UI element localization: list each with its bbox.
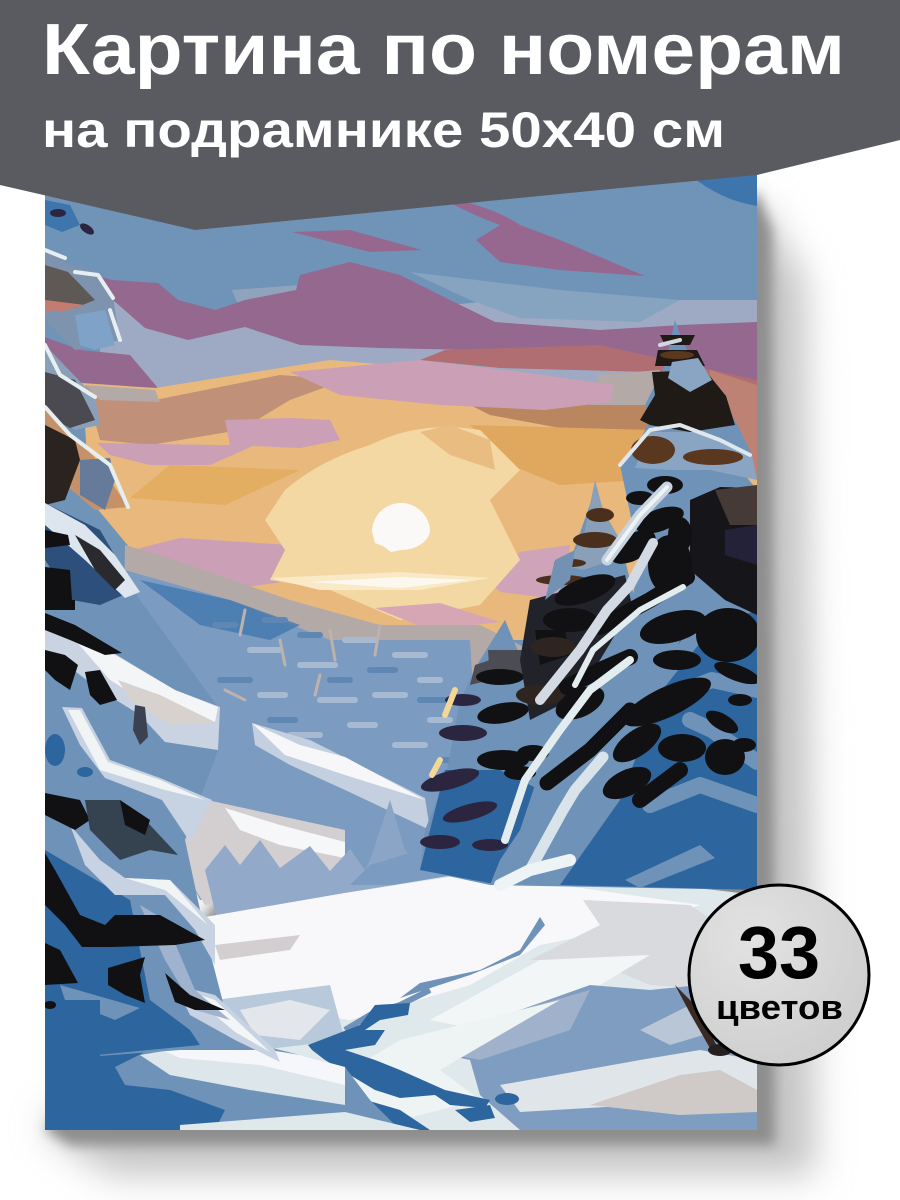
sky bbox=[45, 170, 757, 650]
title: Картина по номерам bbox=[42, 10, 845, 90]
top banner bbox=[0, 0, 900, 230]
left mound bbox=[100, 1052, 225, 1130]
pale blue cloud layer bbox=[100, 300, 757, 388]
mid-blue snow boughs bbox=[642, 634, 757, 813]
pink clouds bbox=[290, 360, 615, 410]
ledge branches at right bbox=[675, 985, 719, 1050]
central snow bbox=[352, 1000, 560, 1117]
blue trail bbox=[308, 1003, 490, 1108]
foreground snow bbox=[100, 876, 757, 1130]
canvas shadow bbox=[45, 190, 815, 1175]
white ledges bbox=[45, 503, 280, 1062]
blue shadow bank bbox=[460, 985, 757, 1130]
subtitle: на подрамнике 50х40 см bbox=[42, 102, 725, 158]
black branches bbox=[44, 530, 225, 1010]
sun bbox=[372, 503, 430, 552]
forest texture bbox=[250, 640, 450, 745]
distant forest bbox=[120, 545, 530, 900]
lower boughs base bbox=[45, 503, 270, 1060]
pale glow bbox=[265, 427, 520, 620]
number: 33 bbox=[738, 911, 820, 994]
painting bbox=[44, 170, 762, 1130]
warm horizon bbox=[82, 360, 757, 640]
snow slopes bbox=[185, 723, 448, 915]
small firs behind bbox=[419, 480, 640, 885]
right large fir bbox=[490, 320, 762, 890]
snow ribbons bbox=[500, 340, 750, 885]
upper dark tiers bbox=[640, 335, 735, 432]
dark bough mass bbox=[690, 487, 757, 615]
upper boughs bbox=[45, 250, 120, 350]
left fir bbox=[44, 200, 280, 1130]
trail upper light blue bbox=[400, 917, 545, 998]
label: цветов bbox=[716, 989, 843, 1027]
colour count badge bbox=[689, 885, 869, 1065]
top sprig bbox=[45, 200, 80, 232]
purple clouds bbox=[454, 203, 644, 276]
